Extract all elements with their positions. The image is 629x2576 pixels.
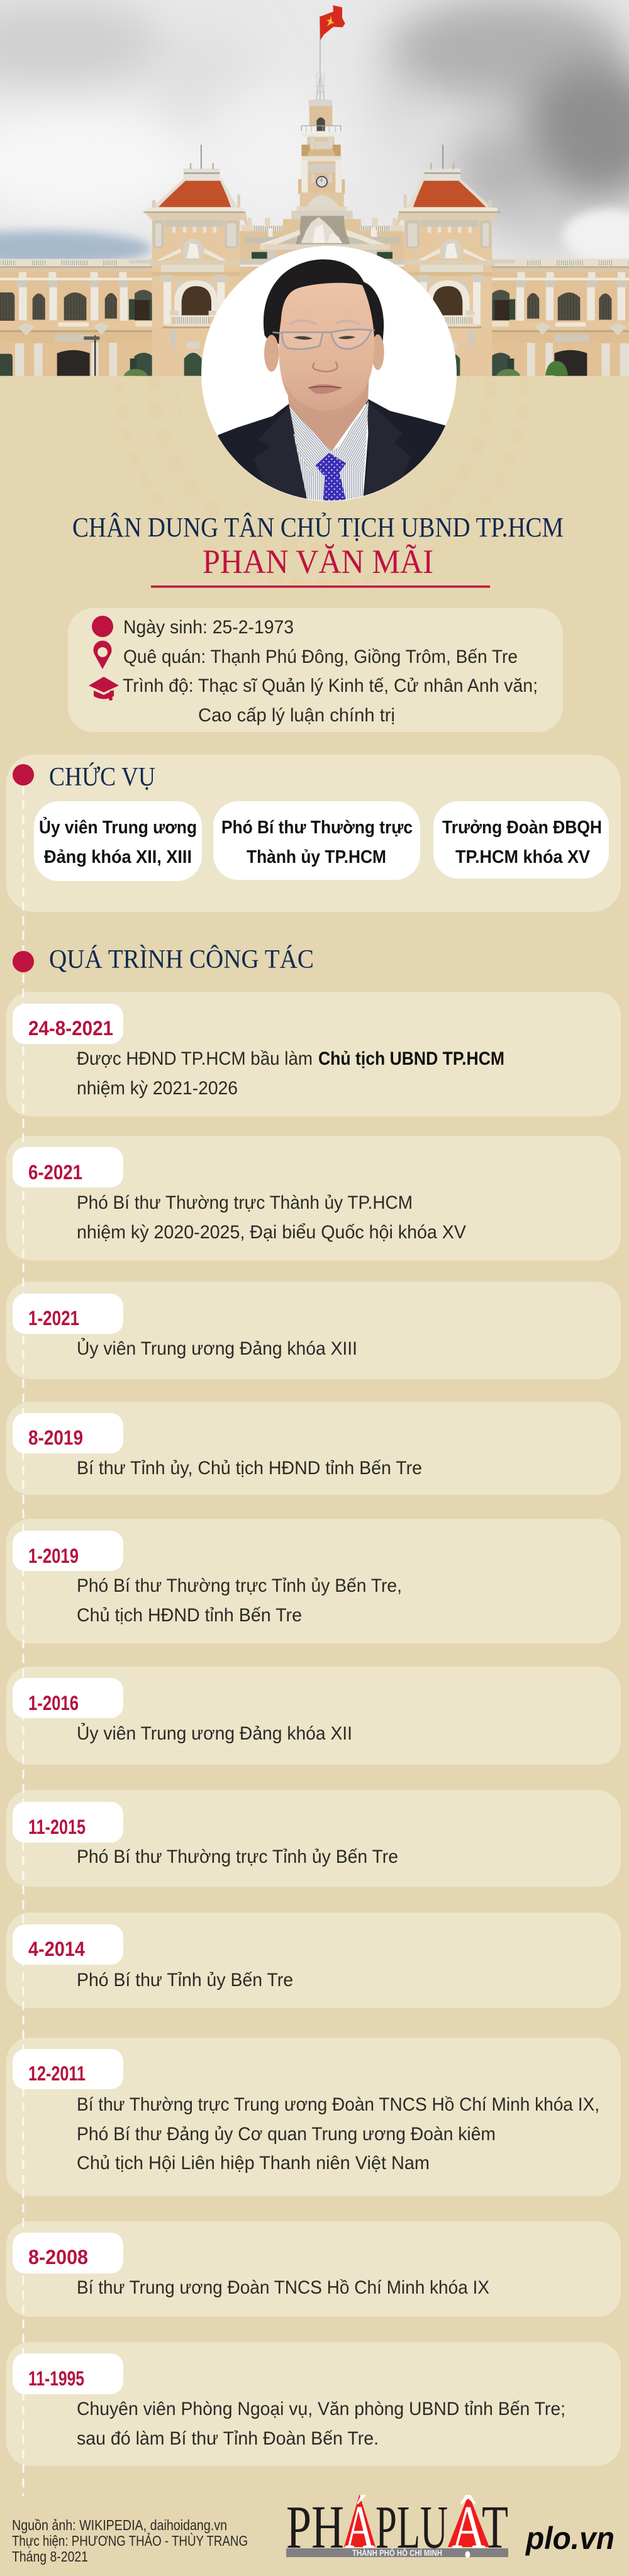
entry 11-1995: Chuyên viên Phòng Ngoại vụ, Văn phòng UBND tỉnh Bến Tre;: [77, 2399, 565, 2419]
entry 1-2016: [13, 1678, 352, 1744]
timeline dashed line: [23, 786, 24, 2496]
hero photo: city hall: [0, 0, 629, 376]
entry 1-2021: 1-2021: [28, 1307, 79, 1330]
entry 11-1995: sau đó làm Bí thư Tỉnh Đoàn Bến Tre.: [77, 2428, 379, 2449]
position card 1: Đảng khóa XII, XIII: [44, 847, 192, 867]
credits: Tháng 8-2021: [12, 2548, 88, 2565]
tie: [316, 453, 346, 501]
entry 1-2021: Ủy viên Trung ương Đảng khóa XIII: [77, 1338, 357, 1359]
entry 8-2019: [13, 1413, 422, 1479]
birth date: Ngày sinh: 25-2-1973: [123, 617, 294, 638]
logo: Pháp Luật: T: [482, 2494, 508, 2561]
entry 1-2016: 1-2016: [28, 1692, 79, 1714]
suit: [218, 399, 445, 499]
shirt: [294, 434, 366, 505]
position card 2: Phó Bí thư Thường trực: [221, 818, 413, 838]
entry 24-8-2021: Được HĐND TP.HCM bầu làm: [77, 1048, 313, 1069]
building left wing: [0, 145, 322, 376]
logo: Pháp Luật: PH: [286, 2494, 344, 2561]
entry 1-2019: Chủ tịch HĐND tỉnh Bến Tre: [77, 1605, 302, 1626]
credits: [12, 2517, 248, 2565]
entry 1-2019: Phó Bí thư Thường trực Tỉnh ủy Bến Tre,: [77, 1575, 402, 1596]
credits: Thực hiện: PHƯƠNG THẢO - THÙY TRANG: [12, 2531, 248, 2549]
entry 1-2019: 1-2019: [28, 1545, 79, 1567]
entry 4-2014: [13, 1924, 293, 1990]
mouth: [308, 384, 342, 394]
entry 11-1995: [13, 2353, 565, 2449]
sky with clouds: [0, 0, 629, 259]
statue group: [296, 216, 350, 244]
building right wing: [322, 145, 629, 376]
entry 24-8-2021: [13, 1004, 504, 1099]
panel: positions: [6, 755, 621, 912]
entry 8-2019: 8-2019: [28, 1426, 83, 1449]
entry 4-2014: 4-2014: [28, 1938, 85, 1960]
logo: Pháp Luật: PLU: [376, 2494, 448, 2561]
entry 12-2011: Phó Bí thư Đảng ủy Cơ quan Trung ương Đoàn kiêm: [77, 2124, 496, 2145]
title line: name: PHAN VĂN MÃI: [203, 543, 433, 580]
entry 8-2008: 8-2008: [28, 2246, 88, 2268]
clock tower with flag: [264, 5, 390, 250]
brows: [289, 321, 316, 325]
entry 11-2015: 11-2015: [28, 1816, 86, 1838]
hometown: Quê quán: Thạnh Phú Đông, Giồng Trôm, Bến Tre: [123, 647, 518, 667]
entry 12-2011: Chủ tịch Hội Liên hiệp Thanh niên Việt Nam: [77, 2153, 430, 2174]
position card 2: Thành ủy TP.HCM: [247, 847, 386, 867]
nose: [313, 362, 337, 372]
flag pole: [320, 16, 321, 99]
entry 6-2021: Phó Bí thư Thường trực Thành ủy TP.HCM: [77, 1192, 413, 1213]
entry 24-8-2021: 24-8-2021: [28, 1017, 113, 1040]
entry 4-2014: Phó Bí thư Tỉnh ủy Bến Tre: [77, 1970, 293, 1990]
entry 11-2015: Phó Bí thư Thường trực Tỉnh ủy Bến Tre: [77, 1846, 398, 1867]
right bush: [545, 361, 568, 375]
entry 11-1995: 11-1995: [28, 2367, 84, 2390]
title: [72, 512, 564, 580]
icon: location pin: [93, 641, 112, 669]
position card 3: [433, 801, 609, 879]
ears: [264, 335, 279, 372]
portrait white circle: [201, 246, 457, 501]
section: positions heading: [13, 762, 155, 792]
entry 24-8-2021: nhiệm kỳ 2021-2026: [77, 1078, 238, 1099]
logo: Pháp Luật: THÀNH PHỐ HỒ CHÍ MINH: [352, 2547, 442, 2558]
lamp post: [84, 335, 99, 376]
collars: [289, 407, 331, 475]
clock: [315, 175, 328, 189]
position card 3: Trưởng Đoàn ĐBQH: [442, 818, 602, 838]
entry 6-2021: 6-2021: [28, 1161, 82, 1184]
education line 2: Cao cấp lý luận chính trị: [198, 705, 395, 726]
entry 24-8-2021: Chủ tịch UBND TP.HCM: [318, 1048, 504, 1069]
panel: personal info: [68, 608, 563, 732]
title line: portrait heading: CHÂN DUNG TÂN CHỦ TỊCH UBND TP.HCM: [72, 512, 564, 543]
timeline panels: [6, 992, 621, 2466]
section: positions heading: CHỨC VỤ: [49, 762, 155, 792]
flag: [320, 5, 345, 40]
icon: birth date dot: [92, 616, 113, 637]
position card 2: [213, 801, 420, 880]
entry 8-2019: Bí thư Tỉnh ủy, Chủ tịch HĐND tỉnh Bến Tre: [77, 1458, 422, 1479]
entry 6-2021: [13, 1147, 466, 1243]
entry 1-2016: Ủy viên Trung ương Đảng khóa XII: [77, 1723, 352, 1744]
logo: Pháp Luật: Ậ: [452, 2494, 486, 2561]
glasses: [272, 330, 375, 349]
position card 3: TP.HCM khóa XV: [455, 847, 591, 867]
credits: Nguồn ảnh: WIKIPEDIA, daihoidang.vn: [12, 2517, 227, 2533]
portrait: [201, 246, 465, 505]
logo: Pháp Luật: Á: [345, 2494, 375, 2561]
decorative drum pattern: [107, 166, 537, 596]
entry 12-2011: Bí thư Thường trực Trung ương Đoàn TNCS Hồ Chí Minh khóa IX,: [77, 2094, 599, 2115]
face: [279, 283, 374, 420]
position card 1: [34, 801, 202, 881]
education: Trình độ: Thạc sĩ Quản lý Kinh tế, Cử nhân Anh văn;: [123, 675, 538, 696]
entry 1-2019: [13, 1531, 402, 1626]
hair: [264, 259, 384, 344]
entry 12-2011: [13, 2049, 599, 2174]
entry 8-2008: Bí thư Trung ương Đoàn TNCS Hồ Chí Minh khóa IX: [77, 2277, 489, 2298]
entry 11-2015: [13, 1802, 398, 1867]
icon: graduation cap: [89, 677, 119, 701]
section: career heading: QUÁ TRÌNH CÔNG TÁC: [49, 945, 314, 974]
position card 1: Ủy viên Trung ương: [39, 816, 197, 838]
eyes: [294, 336, 313, 340]
logo: Pháp Luật: [286, 2494, 508, 2561]
entry 1-2021: [13, 1294, 357, 1359]
entry 8-2008: [13, 2233, 489, 2298]
neck: [287, 375, 369, 452]
entry 6-2021: nhiệm kỳ 2020-2025, Đại biểu Quốc hội khóa XV: [77, 1222, 466, 1243]
entry 12-2011: 12-2011: [28, 2062, 86, 2085]
logo: plo.vn: plo.vn: [525, 2521, 615, 2556]
